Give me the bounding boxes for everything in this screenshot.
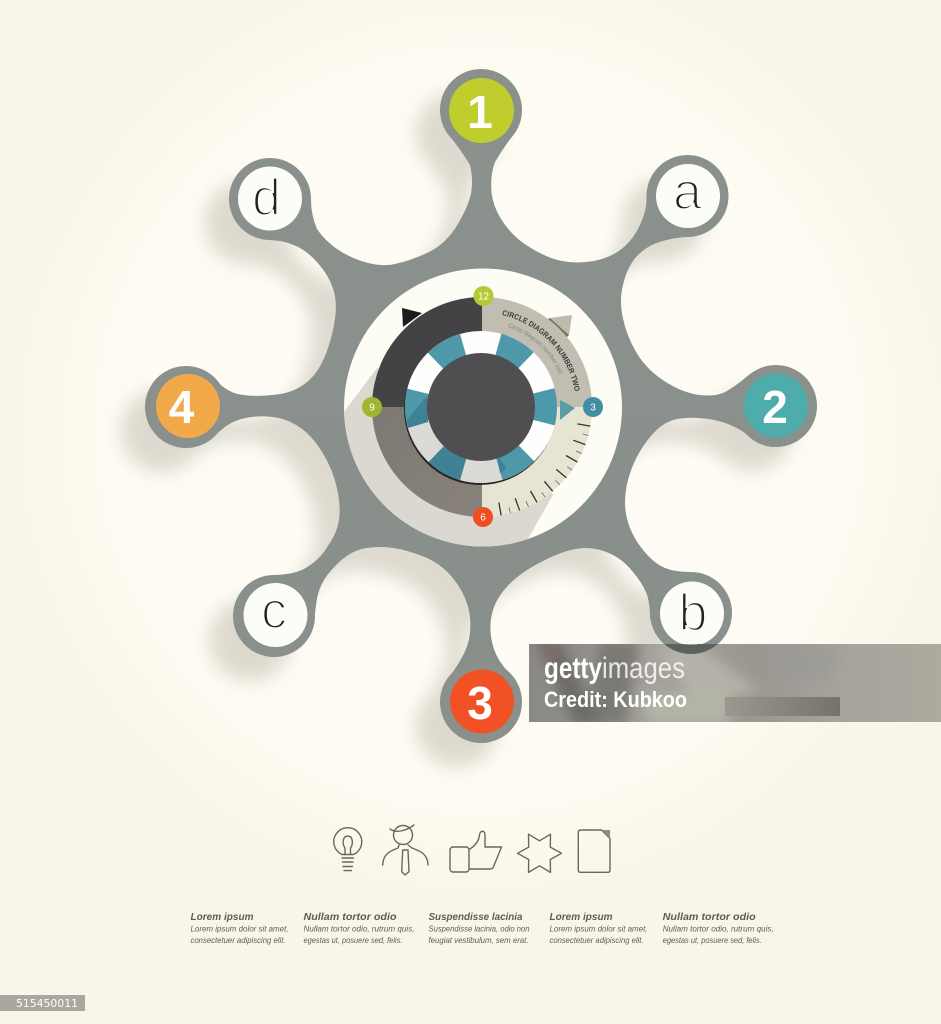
- node c: c: [261, 582, 287, 640]
- dial subtitle on arc: Circle diagram number two: [508, 324, 562, 374]
- marker 9: 9: [369, 402, 375, 414]
- ring quadrant: tan with title: [482, 297, 592, 407]
- ring quadrant: dark: [372, 297, 482, 407]
- node d: [229, 158, 311, 240]
- column 1: [190, 911, 288, 945]
- node a: a: [673, 163, 702, 221]
- column 3: Suspendisse lacinia, odio non: [428, 924, 530, 934]
- marker 12: 12: [478, 292, 489, 302]
- node 3: [440, 661, 522, 743]
- pointer: grey triangle: [546, 315, 572, 338]
- column 1: Lorem ipsum dolor sit amet,: [190, 924, 288, 934]
- ring quadrant: cream scale: [482, 407, 592, 517]
- column 2: Nullam tortor odio: [304, 911, 397, 923]
- icon: document page: [578, 830, 610, 872]
- column 1: consectetuer adipiscing elit.: [190, 935, 286, 945]
- watermark bar: [529, 644, 941, 722]
- node 1: 1: [467, 86, 493, 138]
- text columns: [190, 911, 774, 945]
- node 3: 3: [467, 677, 493, 729]
- column 1: Lorem ipsum: [190, 911, 254, 923]
- pointer: teal triangle: [560, 400, 575, 420]
- marker 9: [362, 397, 382, 417]
- long soft shadows of the network: [121, 93, 793, 767]
- node a: [646, 155, 728, 237]
- getty logo text: images: [602, 652, 685, 685]
- image id tag: 515450011: [16, 997, 78, 1010]
- ring quadrant: taupe: [372, 407, 482, 517]
- column 2: [304, 911, 414, 945]
- image id tag: [0, 995, 85, 1011]
- node b: b: [679, 584, 707, 642]
- marker 3: 3: [590, 402, 596, 414]
- column 2: Nullam tortor odio, rutrum quis,: [304, 924, 414, 934]
- white centre disc: [344, 268, 622, 546]
- icon: six-point star: [518, 834, 562, 872]
- node 4: [145, 366, 227, 448]
- column 5: [663, 911, 774, 945]
- node 2: 2: [762, 381, 788, 433]
- column 4: consectetuer adipiscing elit.: [550, 935, 644, 945]
- scale ticks: [499, 424, 590, 515]
- central circle diagram: [344, 268, 622, 546]
- long shadow of dial: [344, 368, 553, 546]
- column 4: Lorem ipsum dolor sit amet,: [550, 924, 648, 934]
- node 4: 4: [169, 381, 195, 433]
- marker 3: [583, 397, 603, 417]
- credit line: Credit: Kubkoo: [544, 687, 687, 712]
- column 3: feugiat vestibulum, sem erat.: [428, 935, 528, 945]
- icon row: [334, 825, 610, 875]
- network: hub and eight nodes: [145, 69, 817, 743]
- dial title on arc: CIRCLE DIAGRAM NUMBER TWO: [502, 310, 580, 391]
- column 4: [550, 911, 648, 945]
- icon: light bulb: [334, 828, 362, 871]
- column 5: egestas ut, posuere sed, felis.: [663, 935, 762, 945]
- marker 6: 6: [480, 512, 486, 524]
- marker 12: [474, 286, 494, 306]
- column 5: Nullam tortor odio: [663, 911, 756, 923]
- centre disc: [427, 353, 535, 461]
- column 3: Suspendisse lacinia: [428, 911, 523, 923]
- icon: businessman: [383, 825, 428, 875]
- pointer: black triangle: [402, 308, 422, 327]
- inner segmented wheel: [391, 317, 571, 497]
- column 2: egestas ut, posuere sed, felis.: [304, 935, 402, 945]
- column 3: [428, 911, 530, 945]
- node b seen through bar: [664, 644, 718, 654]
- node 1: [440, 69, 522, 151]
- node 2: [735, 365, 817, 447]
- column 4: Lorem ipsum: [550, 911, 612, 923]
- hub connector shape: [186, 110, 776, 702]
- icon: thumbs up: [450, 831, 502, 872]
- node b: [650, 572, 732, 654]
- column 5: Nullam tortor odio, rutrum quis,: [663, 924, 774, 934]
- marker 6: [473, 507, 493, 527]
- node d: d: [252, 169, 281, 227]
- getty logo text: getty: [544, 652, 602, 685]
- node c: [233, 575, 315, 657]
